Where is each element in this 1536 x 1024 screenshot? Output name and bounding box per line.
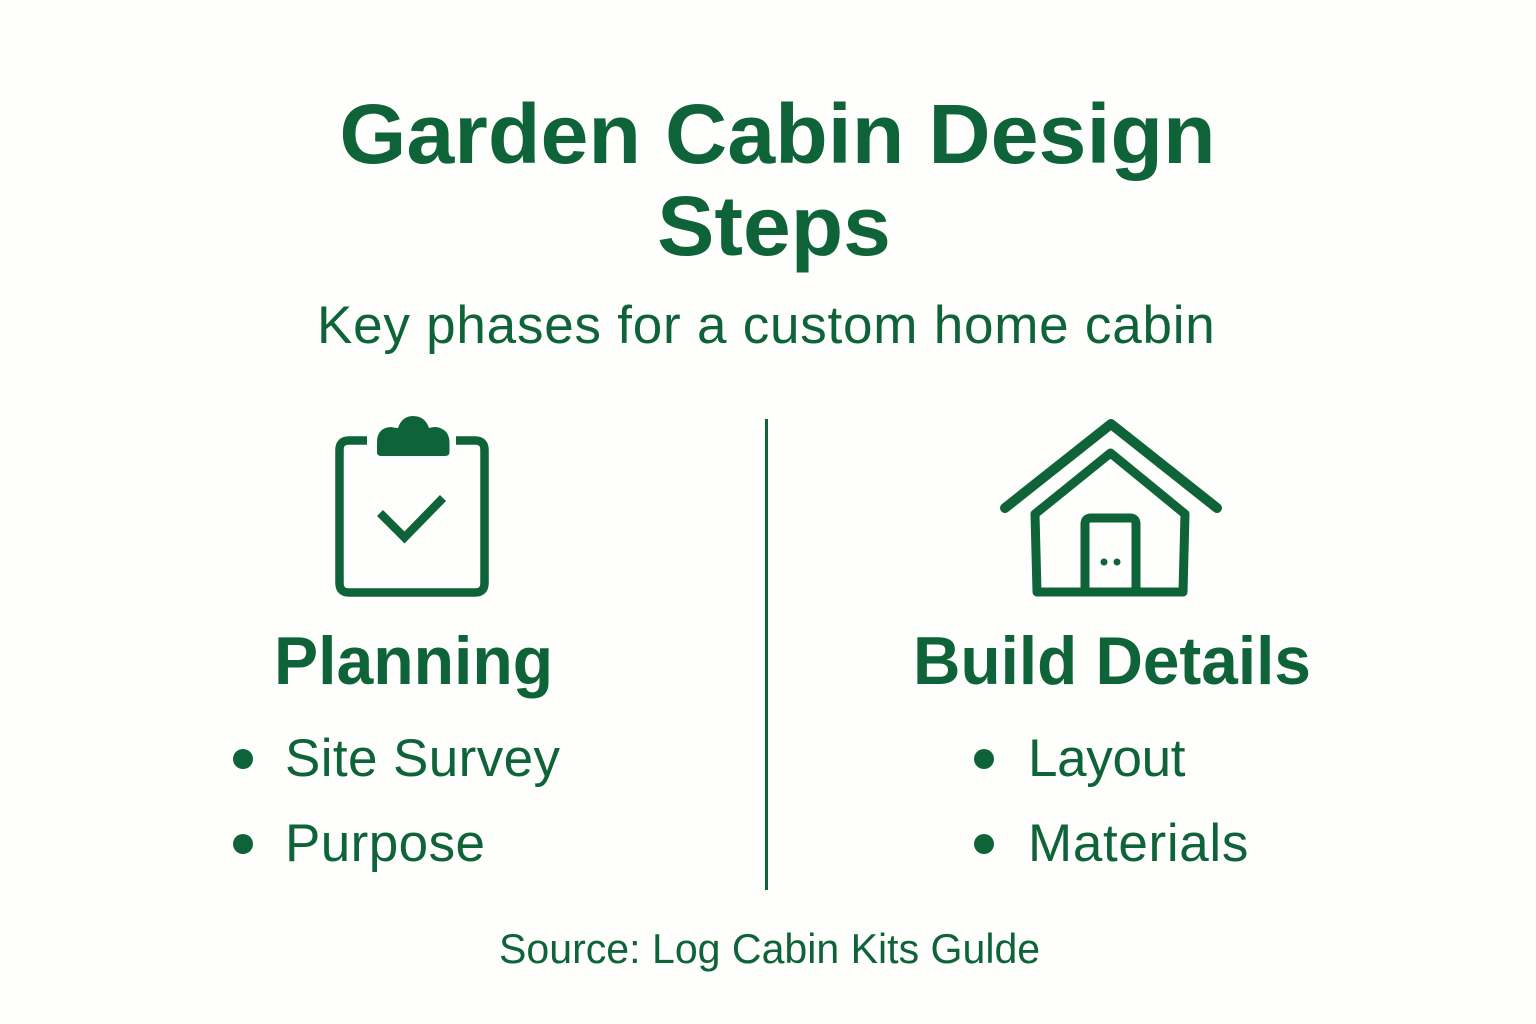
panel: planning [233, 623, 560, 873]
panel: build details [913, 623, 1311, 873]
bullet: materials: Materials [1028, 814, 1249, 873]
subtitle: Key phases for a custom home cabin [317, 296, 1216, 355]
bullet: site survey: Site Survey [285, 729, 560, 788]
title: Steps [657, 179, 891, 273]
heading: build details: Build Details [913, 623, 1311, 699]
icon: house [1000, 419, 1222, 596]
title: Garden Cabin Design [339, 87, 1216, 181]
title [339, 87, 1216, 273]
source note: Source: Log Cabin Kits Gulde [499, 925, 1040, 972]
divider [765, 419, 768, 890]
bullet: purpose: Purpose [285, 814, 485, 873]
heading: planning: Planning [274, 623, 553, 699]
bullet: layout: Layout [1028, 729, 1185, 788]
icon: clipboard with check [335, 416, 489, 597]
